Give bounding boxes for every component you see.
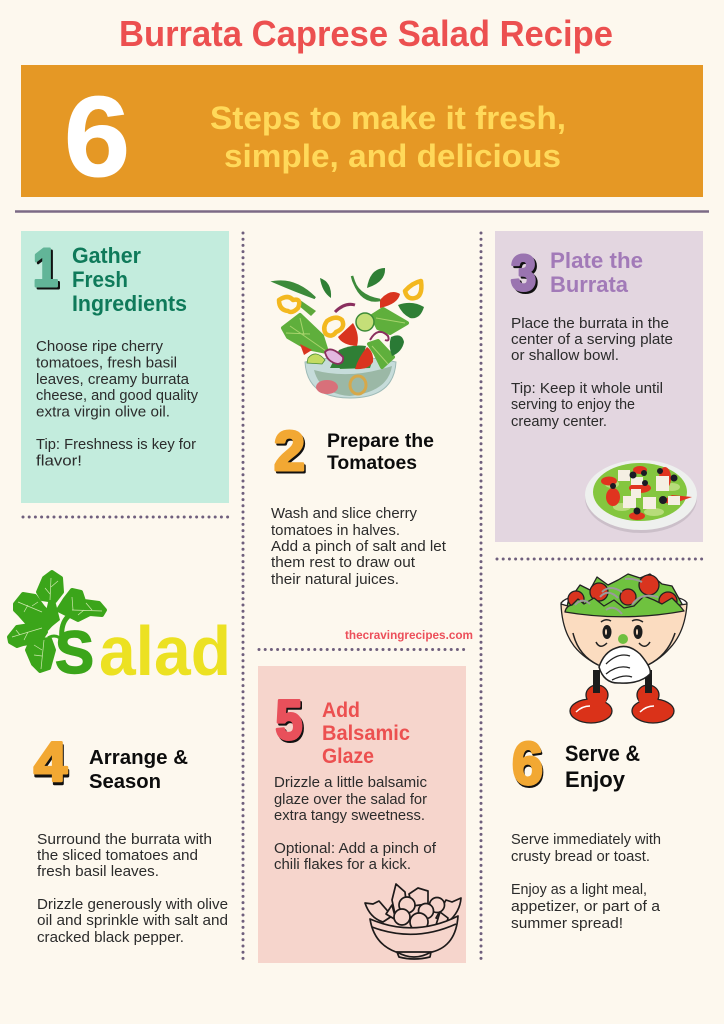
step 6 heading group	[512, 730, 640, 799]
step 4 heading: Arrange &	[89, 746, 188, 769]
step 2 heading group	[274, 419, 434, 484]
website credit: thecravingrecipes.com	[345, 628, 473, 642]
step 2 heading: Prepare the	[327, 431, 434, 452]
step 3 body: Tip: Keep it whole until	[511, 381, 663, 397]
banner big number: 6	[64, 74, 130, 201]
panel: step 3 plate the burrata	[495, 231, 703, 542]
step 4 body: cracked black pepper.	[37, 930, 184, 946]
step 5 body: Optional: Add a pinch of	[274, 841, 437, 857]
step 1 body: flavor!	[36, 454, 82, 470]
step 6 body: appetizer, or part of a	[511, 899, 661, 915]
step 6 body: Enjoy as a light meal,	[511, 882, 647, 898]
step 1 body: tomatoes, fresh basil	[36, 356, 177, 372]
step 6 heading: Serve &	[565, 741, 640, 766]
step 1 body	[36, 339, 199, 470]
step 2 body: Add a pinch of salt and let	[271, 539, 446, 555]
step number 6: 6	[512, 730, 543, 797]
step 1 body: leaves, creamy burrata	[36, 372, 190, 388]
step 3 heading: Burrata	[550, 272, 629, 297]
illustration: salad bowl character	[561, 574, 687, 723]
step 2 heading: Tomatoes	[327, 453, 417, 474]
step 2 body	[271, 506, 446, 588]
step 1 heading	[72, 243, 187, 316]
step 3 body: Place the burrata in the	[511, 316, 669, 332]
step 5 body	[274, 775, 437, 873]
step 1 heading: Ingredients	[72, 291, 187, 316]
step 4 heading: Season	[89, 770, 161, 793]
step number 2: 2	[274, 419, 305, 482]
step 3 heading	[550, 248, 643, 297]
step 6 body: crusty bread or toast.	[511, 849, 650, 865]
step 3 body: center of a serving plate	[511, 332, 673, 348]
step 3 body	[511, 316, 673, 430]
step 5 heading: Balsamic	[322, 721, 410, 745]
step number 2: 2	[276, 421, 306, 484]
step number 3: 3	[511, 245, 536, 301]
step number 6: 6	[513, 732, 544, 799]
step 3 body: serving to enjoy the	[511, 397, 635, 413]
icon: line-art salad bowl	[365, 884, 461, 959]
illustration: tossed salad in glass bowl	[275, 268, 424, 398]
step 4 heading group	[34, 730, 188, 796]
step number 4: 4	[35, 733, 68, 796]
step number 1: 1	[35, 240, 60, 300]
step 4 heading	[89, 746, 188, 793]
step 4 body: oil and sprinkle with salt and	[37, 913, 228, 929]
step number 3: 3	[513, 247, 538, 303]
step 1 body: cheese, and good quality	[36, 388, 199, 404]
banner subtitle: simple, and delicious	[224, 138, 561, 174]
step number 5: 5	[276, 688, 302, 751]
step 1 body: Choose ripe cherry	[36, 339, 164, 355]
step 4 body: Surround the burrata with	[37, 832, 212, 848]
step number 4: 4	[34, 730, 67, 793]
step 5 body: glaze over the salad for	[274, 792, 427, 808]
step 4 body: fresh basil leaves.	[37, 864, 159, 880]
step 3 body: creamy center.	[511, 414, 607, 430]
logo: salad with leaves	[9, 572, 231, 690]
step 1 heading: Fresh	[72, 267, 128, 292]
step 2 body: Wash and slice cherry	[271, 506, 418, 522]
title: Burrata Caprese Salad Recipe	[119, 13, 613, 54]
step 5 body: chili flakes for a kick.	[274, 857, 411, 873]
banner	[21, 65, 703, 201]
step 3 body: or shallow bowl.	[511, 348, 619, 364]
illustration: plate of salad	[585, 460, 697, 533]
step 4 body	[37, 832, 228, 946]
step 1 body: Tip: Freshness is key for	[36, 437, 196, 453]
step 6 heading	[565, 741, 640, 792]
step 4 body: Drizzle generously with olive	[37, 897, 228, 913]
step 5 body: Drizzle a little balsamic	[274, 775, 427, 791]
logo letters alad: alad	[99, 612, 231, 690]
step 2 body: them rest to draw out	[271, 555, 415, 571]
banner subtitle	[210, 100, 566, 174]
step 1 body: extra virgin olive oil.	[36, 404, 170, 420]
step 3 heading: Plate the	[550, 248, 643, 273]
step 5 body: extra tangy sweetness.	[274, 808, 425, 824]
step 5 heading: Glaze	[322, 744, 374, 768]
step 1 heading: Gather	[72, 243, 141, 268]
step 5 heading: Add	[322, 698, 360, 722]
step 6 body: summer spread!	[511, 916, 623, 932]
step number 1: 1	[33, 238, 58, 298]
step number 5: 5	[277, 690, 304, 753]
banner subtitle: Steps to make it fresh,	[210, 100, 566, 136]
step 5 heading	[322, 698, 410, 768]
panel: step 5 add balsamic glaze	[258, 666, 466, 963]
logo letter S: S	[55, 619, 94, 686]
step 2 heading	[327, 431, 434, 474]
step 6 body: Serve immediately with	[511, 832, 661, 848]
panel: step 1 gather fresh ingredients	[21, 231, 229, 503]
step 4 body: the sliced tomatoes and	[37, 848, 198, 864]
step 6 heading: Enjoy	[565, 767, 626, 792]
step 6 body	[511, 832, 661, 932]
step 2 body: tomatoes in halves.	[271, 523, 400, 539]
step 2 body: their natural juices.	[271, 572, 399, 588]
